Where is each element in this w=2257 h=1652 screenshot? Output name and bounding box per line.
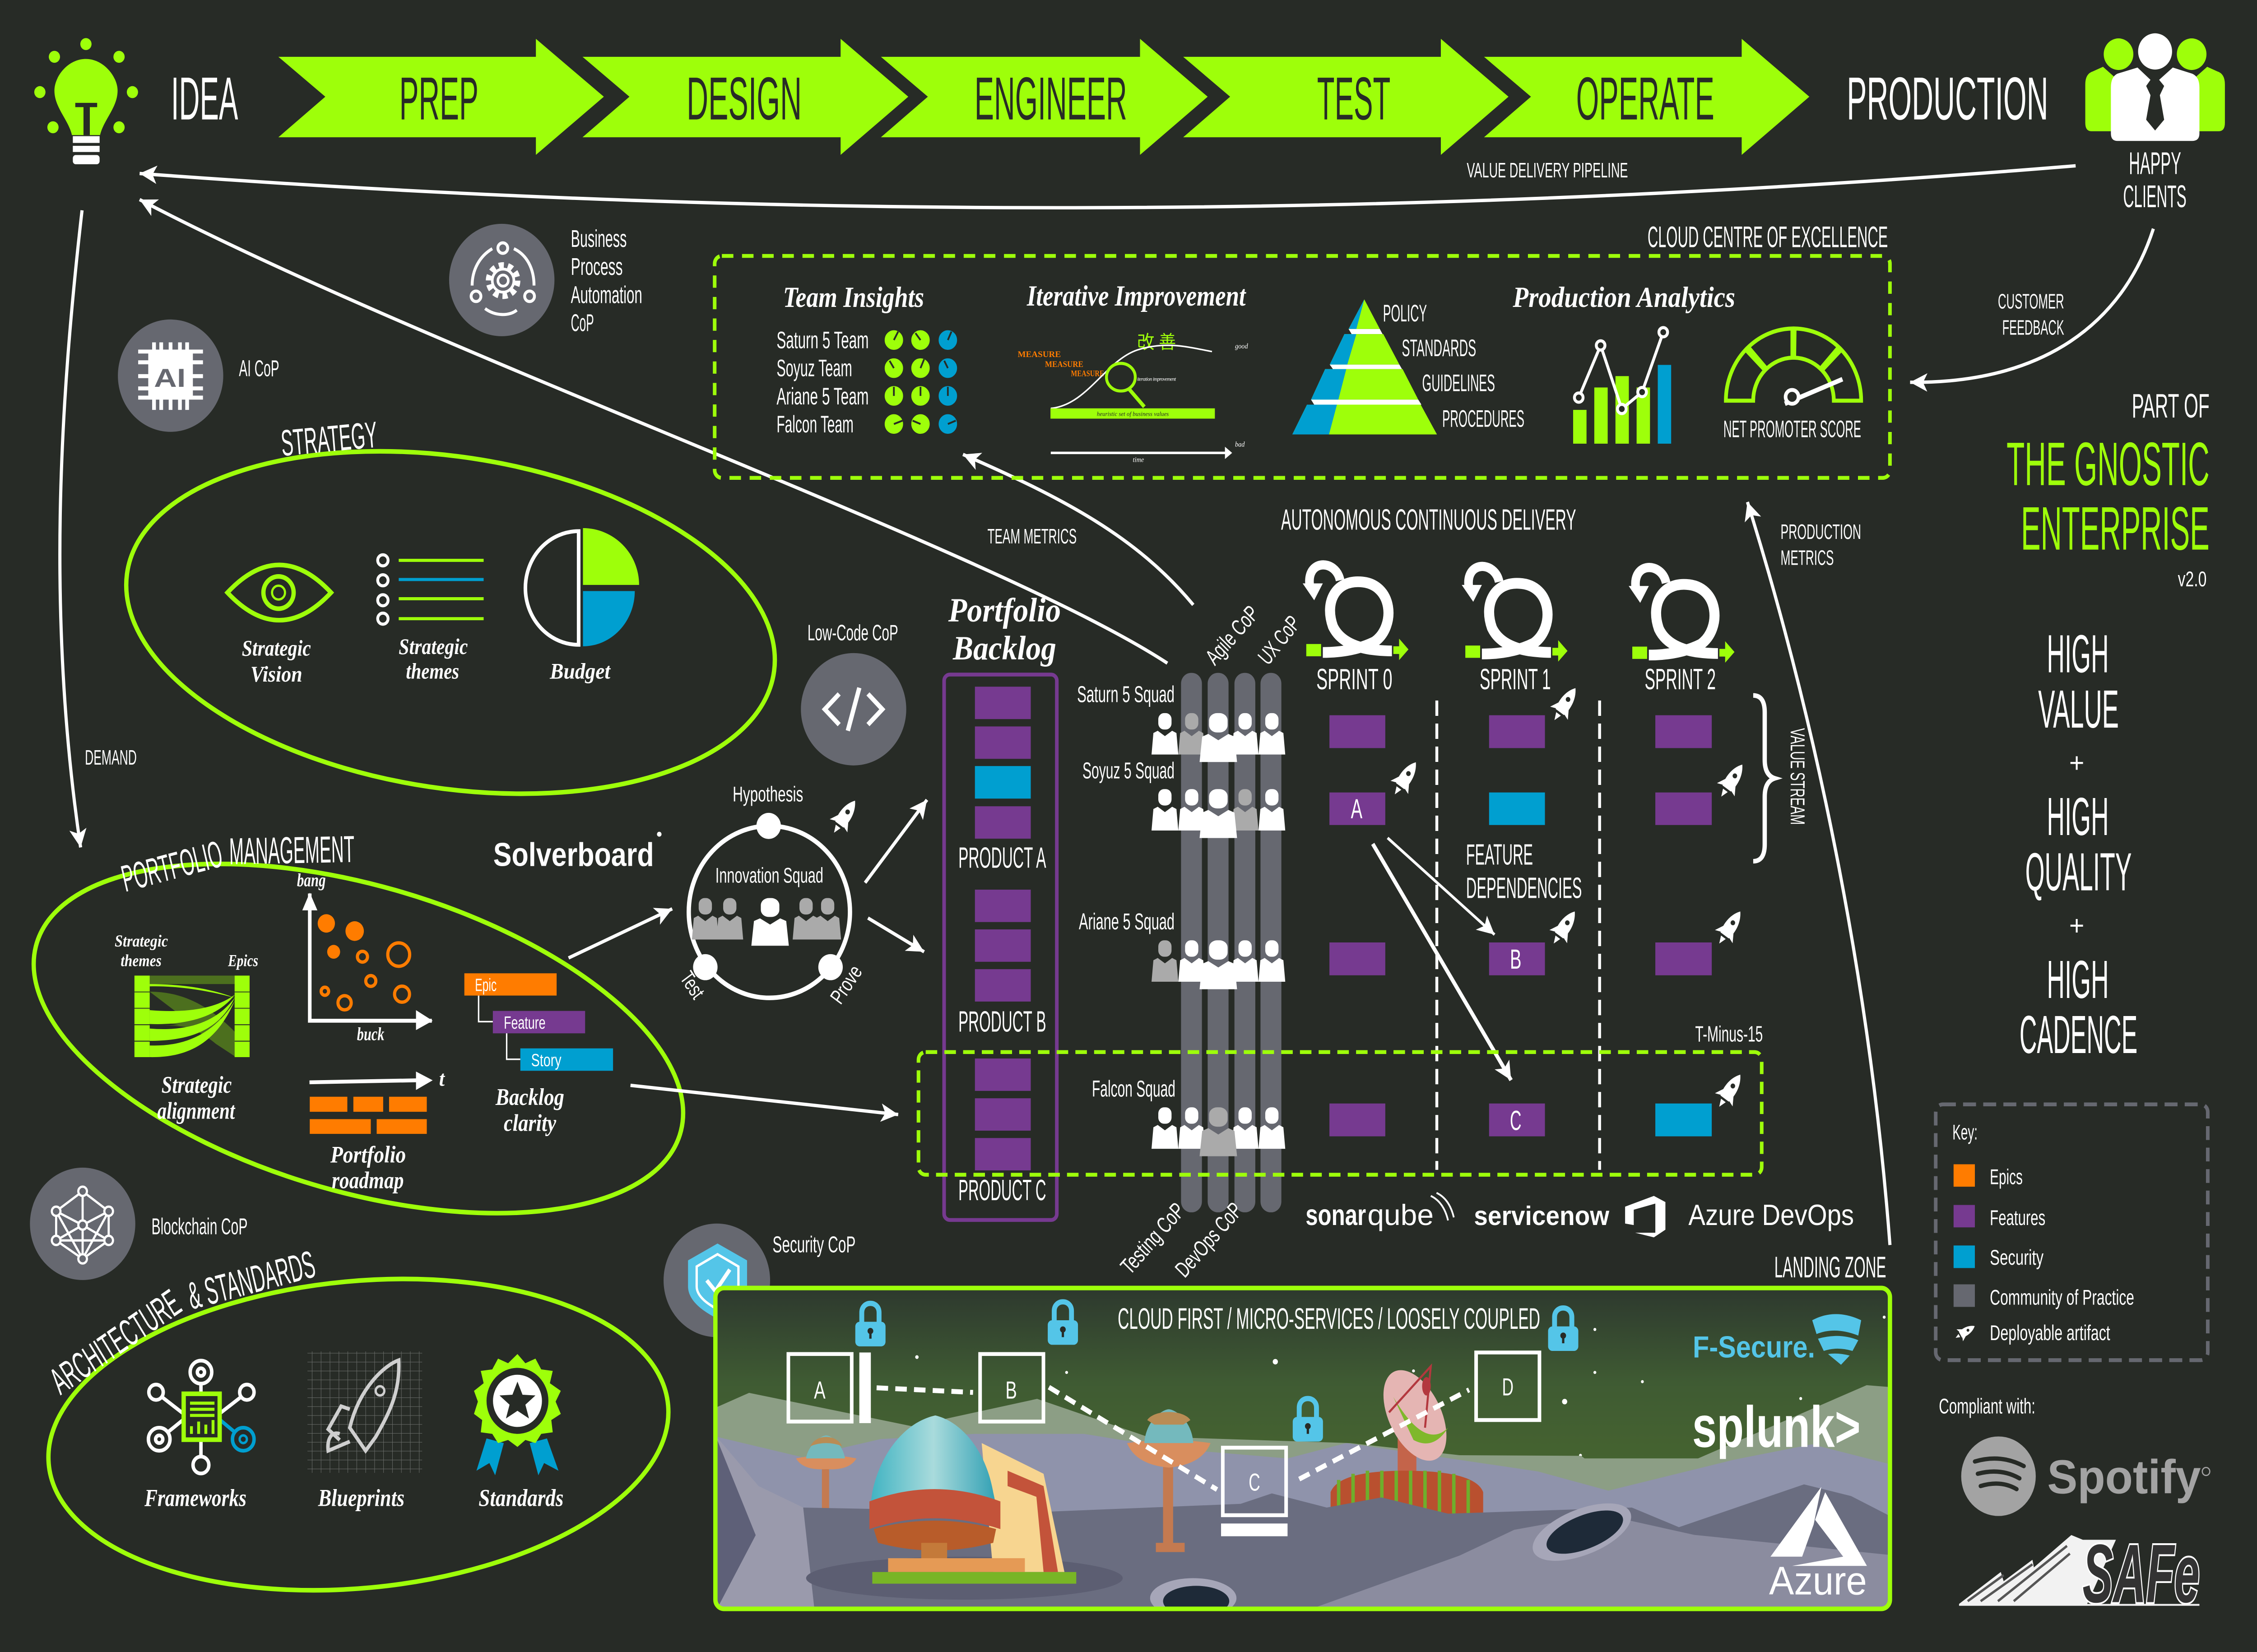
- innovation squad cycle: Prove: [826, 961, 867, 1008]
- arrow: portfolio to innovation squad: [569, 909, 672, 958]
- heading: portfolio management: PORTFOLIO: [118, 833, 226, 900]
- icon: standards badge: Standards: [478, 1485, 563, 1512]
- innovation squad cycle: [676, 782, 867, 1008]
- squad labels: Ariane 5 Squad: [1079, 909, 1175, 934]
- value delivery pipeline: [279, 39, 1809, 155]
- logo: servicenow: servicenow: [1474, 1202, 1609, 1231]
- label: low-code cop: Low-Code CoP: [808, 621, 898, 645]
- strategic themes: Strategic: [399, 635, 468, 659]
- heading: architecture and standards: & STANDARDS: [184, 1243, 319, 1318]
- microservice a: A: [814, 1377, 826, 1404]
- backlog clarity: Feature: [504, 1013, 546, 1033]
- microservice connections: [877, 1387, 1469, 1490]
- production analytics: [1512, 281, 1861, 444]
- panel: key: [1936, 1104, 2208, 1360]
- arrow: operate: OPERATE: [1576, 65, 1714, 132]
- dish and base: [1331, 1359, 1483, 1520]
- microservice b: B: [1005, 1377, 1017, 1404]
- policy pyramid: STANDARDS: [1402, 335, 1476, 361]
- label: customer feedback: FEEDBACK: [2002, 316, 2064, 339]
- policy pyramid: POLICY: [1383, 300, 1427, 326]
- sprint 1: B: [1510, 943, 1522, 975]
- label: strategic alignment: Strategic: [162, 1072, 232, 1098]
- logo: sonarqube: [1305, 1193, 1454, 1232]
- building: [869, 1415, 1076, 1584]
- heading: cloud centre of excellence: CLOUD CENTRE OF EXCELLENCE: [1648, 220, 1888, 254]
- iterative improvement: MEASURE: [1017, 350, 1061, 359]
- squad people: [692, 898, 841, 946]
- sprint 0: [1303, 565, 1408, 1137]
- sprint 1: SPRINT 1: [1480, 663, 1551, 696]
- label: team metrics: TEAM METRICS: [987, 525, 1077, 548]
- arrow: demand: [60, 210, 82, 847]
- heading: architecture and standards: ARCHITECTURE: [43, 1281, 188, 1402]
- product a: PRODUCT A: [958, 842, 1046, 874]
- strategic alignment sankey: [115, 932, 258, 1057]
- product a: [958, 687, 1046, 874]
- sprint 2: [1629, 567, 1734, 1137]
- squad labels: Falcon Squad: [1092, 1076, 1175, 1102]
- portfolio backlog heading: [948, 591, 1061, 667]
- heading: strategy: STRATEGY: [279, 413, 379, 464]
- iterative improvement: heuristic set of business values: [1097, 410, 1169, 418]
- iterative improvement: time: [1133, 456, 1144, 464]
- strategic vision: Strategic: [242, 636, 311, 661]
- icon: low-code cop: [801, 653, 906, 766]
- tool logos: [1305, 1193, 1854, 1237]
- clock indicators: [884, 329, 958, 435]
- arrow: squads to idea: [139, 200, 1167, 663]
- strategic themes: themes: [406, 659, 459, 684]
- panel: key: Features: [1990, 1205, 2045, 1230]
- cop labels: DevOps CoP: [1170, 1197, 1247, 1282]
- label: cloud first: CLOUD FIRST / MICRO-SERVICES / LOOSELY COUPLED: [1118, 1302, 1540, 1335]
- cop labels: Agile CoP: [1201, 601, 1263, 670]
- portfolio backlog heading: Portfolio: [948, 591, 1061, 629]
- security locks: [855, 1302, 1578, 1442]
- tower: [1127, 1409, 1211, 1552]
- label: business process automation cop: Process: [571, 253, 622, 280]
- label: compliant with: Compliant with:: [1939, 1394, 2035, 1418]
- logo: spotify: [1961, 1436, 2210, 1516]
- iterative improvement: Iterative Improvement: [1026, 279, 1246, 312]
- budget pie: [525, 528, 639, 684]
- panel: key: Deployable artifact: [1990, 1321, 2110, 1345]
- panel: architecture and standards: [36, 1243, 681, 1616]
- bar and line chart: [1573, 328, 1671, 444]
- panel: key: Community of Practice: [1990, 1285, 2134, 1309]
- panel: cloud centre of excellence: [715, 220, 1890, 478]
- icon: happy clients: [2085, 33, 2225, 141]
- logo: azure: Azure: [1769, 1559, 1867, 1603]
- label: strategic alignment: [158, 1072, 236, 1124]
- label: production metrics: [1781, 521, 1861, 570]
- arrow: customer feedback: [1910, 229, 2153, 382]
- label: idea: IDEA: [171, 65, 238, 132]
- icon: business process automation cop: [449, 224, 554, 336]
- value statements: HIGH: [2047, 787, 2109, 847]
- value statements: +: [2069, 747, 2084, 778]
- arrow: client value loop back to idea: [139, 166, 2076, 208]
- value statements: HIGH: [2047, 950, 2109, 1010]
- strategic themes: [378, 555, 483, 684]
- squad labels: [1077, 682, 1175, 1102]
- icon: ai cop: AI: [154, 363, 186, 392]
- policy pyramid: [1292, 299, 1524, 435]
- microservice a: [788, 1352, 871, 1423]
- label: blockchain cop: Blockchain CoP: [151, 1214, 247, 1239]
- label: security cop: Security CoP: [772, 1232, 855, 1258]
- chart: bang for buck bubbles: [297, 870, 433, 1044]
- sprint 0: SPRINT 0: [1316, 663, 1393, 696]
- scene illustration: [714, 1286, 1891, 1618]
- label: happy clients: HAPPY: [2129, 146, 2181, 181]
- team insights: [776, 281, 958, 437]
- iterative improvement: bad: [1235, 441, 1245, 449]
- label: production metrics: METRICS: [1781, 547, 1834, 570]
- microservice d: [1476, 1352, 1539, 1420]
- arrow: innovation to product a: [865, 800, 927, 883]
- product c: [958, 1058, 1046, 1207]
- squad: saturn 5: [1152, 713, 1285, 762]
- panel: key: Key:: [1952, 1120, 1978, 1144]
- microservice d: D: [1502, 1374, 1514, 1401]
- product b: PRODUCT B: [958, 1006, 1046, 1038]
- value statements: +: [2069, 910, 2084, 941]
- portfolio roadmap: roadmap: [332, 1167, 404, 1194]
- team insights: Ariane 5 Team: [776, 383, 868, 409]
- logo: sonarqube: qube: [1367, 1199, 1434, 1232]
- label: production: PRODUCTION: [1847, 65, 2048, 132]
- chart: bang for buck bubbles: buck: [357, 1024, 385, 1044]
- arrow: test: TEST: [1317, 65, 1390, 132]
- team insights: Falcon Team: [776, 411, 854, 437]
- label: feature dependencies: FEATURE: [1466, 839, 1533, 871]
- sprint 2: SPRINT 2: [1644, 663, 1716, 696]
- product c: PRODUCT C: [958, 1174, 1046, 1207]
- icon: blueprints: Blueprints: [318, 1485, 404, 1512]
- icon: ai cop: [118, 320, 223, 432]
- label: demand: DEMAND: [85, 747, 137, 769]
- net promoter score gauge: NET PROMOTER SCORE: [1723, 416, 1861, 442]
- icon: frameworks: Frameworks: [144, 1485, 246, 1512]
- label: value delivery pipeline: VALUE DELIVERY PIPELINE: [1467, 159, 1628, 182]
- backlog clarity: [464, 973, 613, 1137]
- label: customer feedback: [1998, 290, 2064, 339]
- innovation squad cycle: Test: [676, 967, 709, 1003]
- label: business process automation cop: Automation: [571, 282, 642, 309]
- innovation squad cycle: Hypothesis: [733, 782, 803, 806]
- iterative improvement: MEASURE: [1071, 369, 1104, 378]
- strategic alignment sankey: Epics: [228, 951, 258, 970]
- arrow: operate: [1484, 39, 1809, 155]
- icon: idea light bulb: [34, 38, 138, 164]
- arrow: feature a to c: [1373, 844, 1511, 1080]
- logo: sonarqube: sonar: [1305, 1199, 1366, 1232]
- portfolio backlog heading: Backlog: [952, 629, 1056, 667]
- strategic alignment sankey: themes: [121, 951, 162, 970]
- heading: portfolio management: [118, 828, 355, 900]
- logo: spotify: Spotify: [2047, 1450, 2201, 1504]
- label: production metrics: PRODUCTION: [1781, 521, 1861, 543]
- panel: portfolio backlog: [944, 674, 1057, 1220]
- value stream brace: [1753, 696, 1775, 861]
- logo: azure devops: Azure DevOps: [1688, 1199, 1854, 1232]
- iterative improvement: MEASURE: [1045, 359, 1083, 369]
- label: business process automation cop: CoP: [571, 310, 594, 337]
- sprint 0: A: [1351, 793, 1362, 824]
- arrow: engineer: [881, 39, 1207, 155]
- label: customer feedback: CUSTOMER: [1998, 290, 2064, 313]
- sprint 1: C: [1510, 1105, 1522, 1136]
- value statements: [2020, 624, 2137, 1065]
- panel: the gnostic enterprise: [2006, 387, 2210, 591]
- label: business process automation cop: Business: [571, 226, 627, 253]
- budget pie: Budget: [549, 659, 611, 684]
- arrow: feature a to b: [1388, 838, 1495, 935]
- squad: soyuz 5: [1152, 789, 1285, 838]
- logo: azure devops: [1625, 1196, 1854, 1237]
- heading: autonomous continuous delivery: AUTONOMOUS CONTINUOUS DELIVERY: [1281, 504, 1576, 536]
- backlog clarity: Epic: [475, 975, 497, 995]
- key swatches: [1949, 1164, 1981, 1350]
- logo: solverboard: Solverboard: [493, 836, 654, 873]
- panel: strategy: [105, 410, 796, 835]
- value statements: VALUE: [2038, 680, 2119, 739]
- value statements: HIGH: [2047, 624, 2109, 684]
- microservice c: C: [1249, 1469, 1260, 1496]
- strategic vision: [228, 565, 331, 687]
- portfolio roadmap: t: [439, 1067, 445, 1091]
- product b: [958, 890, 1046, 1038]
- panel: portfolio management: [0, 798, 718, 1279]
- backlog clarity: Story: [531, 1051, 562, 1070]
- backlog clarity: Backlog: [495, 1084, 564, 1111]
- deployable artifact rockets: [1386, 682, 1751, 1114]
- strategic alignment sankey: Strategic: [115, 932, 168, 950]
- logo: f-secure: [1693, 1314, 1861, 1365]
- label: ai cop: AI CoP: [239, 356, 279, 381]
- cop labels: UX CoP: [1254, 611, 1305, 669]
- team insights: Soyuz Team: [776, 355, 852, 381]
- label: happy clients: CLIENTS: [2123, 179, 2187, 214]
- arrow: prep: [279, 39, 604, 155]
- label: value stream: VALUE STREAM: [1786, 728, 1809, 825]
- icon: standards badge: [474, 1354, 563, 1512]
- microservice c: [1221, 1448, 1287, 1536]
- policy pyramid: GUIDELINES: [1422, 370, 1495, 396]
- iterative improvement: good: [1235, 343, 1248, 350]
- arrow: portfolio to product c: [631, 1086, 898, 1114]
- icon: frameworks: [144, 1360, 254, 1512]
- label: happy clients: [2123, 146, 2187, 214]
- panel: key: Epics: [1990, 1165, 2023, 1189]
- panel: the gnostic enterprise: v2.0: [2178, 567, 2206, 591]
- iterative improvement: [1017, 279, 1248, 464]
- production analytics: Production Analytics: [1512, 281, 1735, 314]
- squad labels: Soyuz 5 Squad: [1082, 758, 1175, 784]
- label: strategic alignment: alignment: [158, 1098, 236, 1124]
- team insights: Team Insights: [783, 281, 924, 314]
- net promoter score gauge: [1723, 329, 1861, 442]
- policy pyramid: PROCEDURES: [1442, 405, 1524, 432]
- label: feature dependencies: [1466, 839, 1582, 905]
- sprint 1: [1462, 566, 1568, 1137]
- panel: portfolio management: MANAGEMENT: [229, 828, 355, 872]
- panel: t-minus-15: T-Minus-15: [1695, 1022, 1763, 1047]
- panel: landing zone: [714, 1286, 1891, 1618]
- iterative improvement: 改善: [1137, 328, 1176, 354]
- arrow: team metrics: [963, 455, 1193, 605]
- logo: azure: [1769, 1487, 1867, 1603]
- arrow: prep: PREP: [399, 65, 478, 132]
- backlog clarity: clarity: [504, 1110, 556, 1137]
- arrow: design: [582, 39, 908, 155]
- arrow: production metrics: [1747, 502, 1890, 1245]
- squad: falcon: [1152, 1107, 1285, 1156]
- iterative improvement: iteration improvement: [1137, 376, 1176, 382]
- arrow: design: DESIGN: [687, 65, 802, 132]
- strategic vision: Vision: [251, 662, 302, 687]
- team insights: Saturn 5 Team: [776, 327, 868, 353]
- squad: ariane 5: [1152, 940, 1285, 989]
- cop labels: Testing CoP: [1116, 1198, 1189, 1279]
- icon: security cop: [664, 1224, 770, 1337]
- arrow: test: [1183, 39, 1509, 155]
- microservice b: [980, 1354, 1044, 1421]
- portfolio roadmap: [310, 1067, 445, 1194]
- logo: f-secure: F-Secure.: [1693, 1329, 1815, 1364]
- squad labels: Saturn 5 Squad: [1077, 682, 1175, 707]
- cop labels: [1116, 601, 1305, 1282]
- label: feature dependencies: DEPENDENCIES: [1466, 872, 1582, 905]
- label: landing zone: LANDING ZONE: [1774, 1250, 1886, 1284]
- arrow: innovation to product b: [868, 918, 924, 952]
- arrow: engineer: ENGINEER: [975, 65, 1127, 132]
- panel: key: Security: [1990, 1245, 2043, 1270]
- logo: splunk: splunk>: [1692, 1394, 1861, 1459]
- panel: t-minus-15: [919, 1022, 1763, 1175]
- portfolio roadmap: Portfolio: [330, 1142, 406, 1168]
- innovation squad cycle: Innovation Squad: [715, 863, 823, 887]
- value statements: QUALITY: [2025, 842, 2132, 902]
- tower: [796, 1435, 857, 1508]
- logo: safe: [1959, 1527, 2200, 1620]
- label: business process automation cop: [571, 226, 642, 337]
- community of practice bars: [1181, 673, 1282, 1212]
- icon: blueprints: [307, 1351, 422, 1512]
- icon: blockchain cop: [30, 1168, 135, 1280]
- chart: bang for buck bubbles: bang: [297, 870, 326, 891]
